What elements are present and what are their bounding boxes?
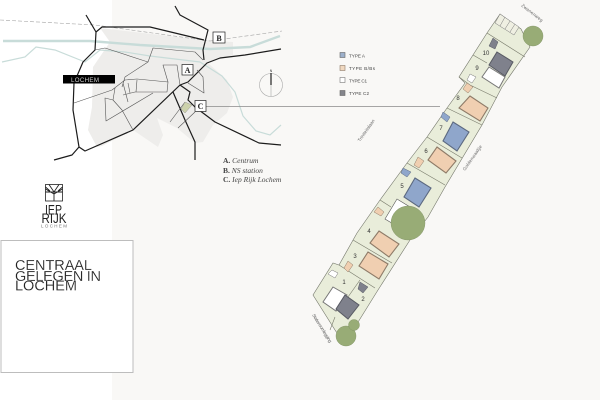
marker B (213, 32, 225, 43)
logo: Iep Rijk Lochem: RIJK (42, 210, 67, 226)
house numbers: 8 (456, 96, 460, 102)
connector line to site plan (205, 106, 440, 108)
logo tree icon (46, 184, 62, 201)
house 5: type A (404, 178, 431, 207)
house 3: type B (359, 252, 388, 279)
house 7: type A (443, 122, 469, 151)
house 9: type C1 (482, 67, 505, 88)
map legend: A. Centrum (223, 156, 259, 165)
house type legend: TYPE C2 (349, 91, 369, 96)
house numbers: 9 (475, 66, 479, 72)
house 4: type B (370, 231, 399, 257)
city area (88, 28, 233, 147)
street names (311, 3, 544, 344)
title: GELEGEN IN (15, 269, 101, 285)
map legend (223, 156, 282, 184)
plot dividers (330, 33, 525, 330)
railway (0, 20, 282, 41)
title (15, 258, 101, 294)
map legend: C. Iep Rijk Lochem (223, 175, 282, 184)
site plan (313, 14, 543, 346)
house 8: type B (459, 96, 488, 121)
house 1: type C1 (323, 287, 347, 311)
site marker (181, 102, 192, 113)
house type legend (340, 52, 376, 96)
plot area (313, 14, 530, 345)
logo: Iep Rijk Lochem (41, 184, 67, 228)
marker A (182, 64, 193, 75)
local streets (74, 48, 204, 130)
parking (495, 14, 519, 35)
main roads (54, 15, 96, 160)
street names: Stationsomlegging (311, 313, 333, 344)
street names: Zwanenweg (520, 3, 544, 23)
trees (336, 26, 543, 346)
house numbers: 4 (367, 229, 371, 235)
logo: Iep Rijk Lochem: LOCHEM (41, 224, 67, 228)
street names: Triniteitslaan (357, 118, 376, 143)
house type legend: TYPE B/Bs (349, 66, 376, 71)
house numbers: 10 (483, 51, 490, 57)
title panel (1, 240, 133, 372)
house type legend: TYPE A (349, 54, 366, 58)
house numbers: 5 (400, 184, 404, 190)
marker A: A (185, 66, 191, 75)
house type legend: TYPE C1 (349, 78, 367, 84)
logo: Iep Rijk Lochem: IEP (45, 202, 62, 218)
house numbers (342, 51, 490, 303)
location map of Lochem (0, 6, 440, 160)
title: CENTRAAL (15, 258, 92, 274)
marker B: B (216, 34, 222, 43)
house numbers: 1 (342, 280, 346, 286)
canal (3, 36, 280, 49)
house numbers: 2 (361, 297, 365, 303)
town label (63, 75, 115, 84)
marker C: C (198, 102, 204, 111)
marker C (195, 100, 206, 112)
house numbers: 7 (439, 126, 443, 132)
map legend: B. NS station (223, 166, 263, 175)
house numbers: 3 (353, 254, 357, 260)
house 6: type B (428, 147, 456, 173)
house 2: type C2 (336, 295, 359, 319)
north arrow: N (270, 69, 273, 73)
title: LOCHEM (15, 278, 77, 294)
street names: Goldenwaaljje (462, 144, 483, 172)
north arrow (260, 69, 282, 97)
river (2, 47, 281, 135)
house 10: type C2 (489, 52, 513, 76)
house numbers: 6 (424, 149, 428, 155)
driveway by large tree (385, 199, 410, 225)
sheds (328, 38, 498, 293)
town label: LOCHEM (71, 77, 99, 84)
